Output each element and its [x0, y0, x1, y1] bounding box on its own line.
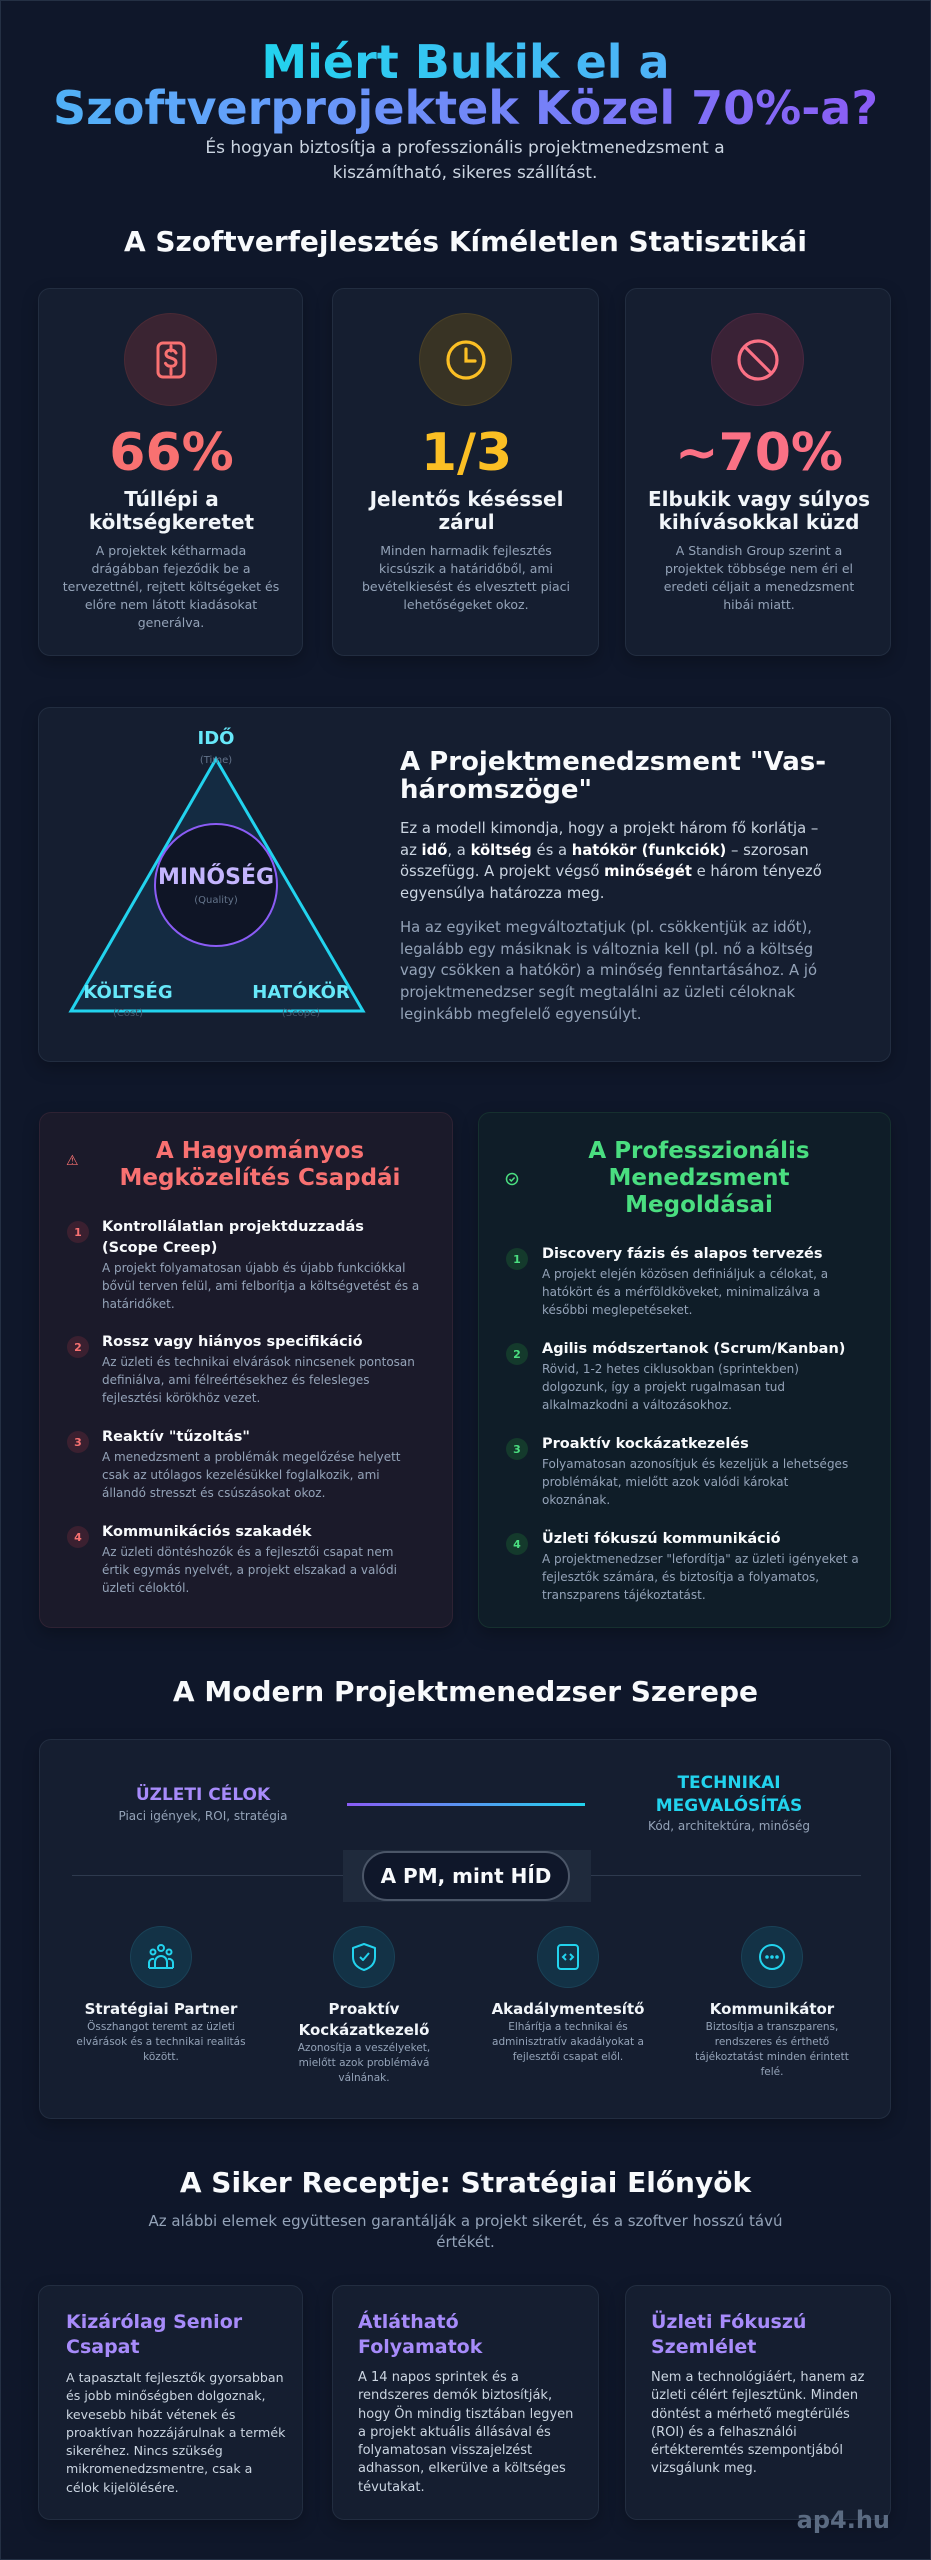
icon: code [537, 1926, 599, 1988]
role: risk manager [298, 1926, 430, 2084]
panel: traditional pitfalls: 4 [74, 1530, 82, 1544]
item 4 [506, 1530, 859, 1602]
title: Miért Bukik el a [261, 35, 670, 89]
item 1: A projekt folyamatosan újabb és újabb funkciókkal bővül terven felül, ami felborítja a költségvetést és a határidőket. [102, 1261, 419, 1311]
item 4: Az üzleti döntéshozók és a fejlesztői csapat nem értik egymás nyelvét, a projekt elszakad a valódi üzleti céloktól. [102, 1545, 397, 1595]
text block: explanation: az idő, a költség és a hatókör (funkciók) – szorosan [400, 842, 809, 859]
panel: PM bridge [39, 1739, 891, 2119]
benefit card: transparent processes [332, 2285, 599, 2520]
benefit card: senior team [38, 2285, 303, 2520]
item 2: Rossz vagy hiányos specifikáció [102, 1334, 363, 1350]
panel: traditional pitfalls: 1 [74, 1226, 82, 1238]
icon: check circle [506, 1172, 518, 1186]
panel: traditional pitfalls: 3 [74, 1436, 82, 1448]
panel: traditional pitfalls [39, 1112, 453, 1628]
panel: professional solutions: 3 [513, 1442, 521, 1456]
triangle diagram [68, 727, 366, 1019]
benefit card: business focus: Üzleti Fókuszú Szemlélet [651, 2311, 806, 2358]
benefit card: senior team: sikeréhez. Nincs szükség [66, 2443, 223, 2458]
business goals: ÜZLETI CÉLOK [136, 1785, 270, 1805]
item 3: A menedzsment a problémák megelőzése helyett csak az utólagos kezelésükkel foglalkozik, ami állandó stresszt és csúszásokat okoz. [102, 1450, 400, 1500]
PM bridge pill: A PM, mint HÍD [381, 1864, 551, 1888]
item 2: Az üzleti és technikai elvárások nincsenek pontosan definiálva, ami félreértésekhez és felesleges fejlesztési körökhöz vezet. [102, 1355, 415, 1405]
text block: explanation: Ez a modell kimondja, hogy a projekt három fő korlátja – [400, 820, 818, 837]
stat label: Elbukik vagy súlyos kihívásokkal küzd [648, 487, 870, 534]
triangle diagram: MINŐSÉG [158, 864, 274, 890]
item 2 [506, 1341, 845, 1412]
panel: professional solutions: 4 [513, 1538, 521, 1550]
item 3: okoznának. [542, 1493, 610, 1507]
panel: iron triangle [38, 707, 891, 1062]
text block: explanation: egyensúlya határozza meg. [400, 885, 605, 902]
PM bridge pill [343, 1850, 591, 1902]
role: communicator: Kommunikátor [710, 2000, 834, 2018]
role: risk manager: Proaktív Kockázatkezelő [299, 2000, 429, 2039]
benefit card: senior team: és jobb minőségben dolgoznak, [66, 2388, 266, 2403]
icon: chat dots [741, 1926, 803, 1988]
benefit card: senior team: proaktívan hozzájárulnak a termék [66, 2425, 285, 2440]
item 4: A projektmenedzser "lefordítja" az üzleti igényeket a fejlesztők számára, és biztosítja a folyamatos, transzparens tájékoztatást. [542, 1552, 859, 1602]
heading: solutions: A Professzionális Menedzsment Megoldásai [588, 1138, 810, 1218]
panel: professional solutions [478, 1112, 891, 1628]
benefit card: transparent processes: A 14 napos sprintek és a rendszeres demók biztosítják, hogy Ön mindig tisztában legyen a projekt aktuális állásával és folyamatosan visszajelzést adhasson, elkerülve a költséges tévutakat. [358, 2370, 573, 2495]
item 3 [67, 1429, 400, 1500]
stat description: A Standish Group szerint a projektek többsége nem éri el eredeti céljait a menedzsment hibái miatt. [664, 543, 854, 612]
item 3: Folyamatosan azonosítjuk és kezeljük a lehetséges [542, 1457, 848, 1471]
technical implementation: Kód, architektúra, minőség [648, 1819, 810, 1833]
item 3: Reaktív "tűzoltás" [102, 1429, 250, 1445]
role: strategic partner: Stratégiai Partner [85, 2000, 237, 2018]
role: strategic partner [76, 1926, 246, 2063]
triangle diagram: (Cost) [113, 1008, 143, 1019]
item 3 [506, 1436, 848, 1507]
item 4 [67, 1524, 397, 1595]
benefit card: senior team: Kizárólag Senior Csapat [66, 2311, 242, 2358]
icon: clock [419, 313, 512, 406]
stat number: 1/3 [421, 423, 512, 483]
role: risk manager: Azonosítja a veszélyeket, mielőtt azok problémává válnának. [298, 2042, 430, 2084]
heading: success recipe: A Siker Receptje: Stratégiai Előnyök [180, 2166, 751, 2199]
item 2: Rövid, 1-2 hetes ciklusokban (sprintekben) dolgozunk, így a projekt rugalmasan tud alkalmazkodni a változásokhoz. [542, 1362, 799, 1412]
item 2 [67, 1334, 415, 1405]
icon: users [130, 1926, 192, 1988]
heading: PM role: A Modern Projektmenedzser Szerepe [173, 1675, 758, 1708]
benefit card: transparent processes: Átlátható Folyamatok [358, 2311, 482, 2358]
icon: shield [333, 1926, 395, 1988]
item 4: Üzleti fókuszú kommunikáció [542, 1531, 781, 1547]
item 3: Proaktív kockázatkezelés [542, 1436, 749, 1452]
benefit card: business focus [625, 2285, 891, 2520]
stat card: failure [625, 288, 891, 656]
stat label: Túllépi a költségkeretet [89, 487, 254, 534]
benefit card: senior team: kevesebb hibát vétenek és [66, 2407, 235, 2422]
icon: ban [711, 313, 804, 406]
text block: explanation: Ha az egyiket megváltoztatjuk (pl. csökkentjük az időt), legalább egy másiknak is változnia kell (pl. nő a költség vagy csökken a hatókör) a minőség fenntartásához. A jó projektmenedzser segít megtalálni az üzleti céloknak leginkább megfelelő egyensúlyt. [400, 919, 817, 1023]
panel: professional solutions: 2 [513, 1348, 521, 1360]
item 1: Kontrollálatlan projektduzzadás (Scope Creep) [102, 1219, 364, 1256]
item 1 [67, 1219, 419, 1311]
benefit card: senior team: célok kijelölésére. [66, 2480, 179, 2495]
item 4: Kommunikációs szakadék [102, 1524, 312, 1540]
triangle diagram: (Time) [200, 755, 232, 766]
icon: dollar [124, 313, 217, 406]
stat label: Jelentős késéssel zárul [370, 487, 563, 534]
triangle diagram: HATÓKÖR [252, 981, 350, 1003]
panel: traditional pitfalls: 2 [74, 1340, 82, 1354]
title: Szoftverprojektek Közel 70%-a? [53, 81, 878, 135]
benefit card: business focus: Nem a technológiáért, hanem az üzleti célért fejlesztünk. Minden döntést a mérhető megtérülés (ROI) és a felhasználói értékteremtés szempontjából vizsgálunk meg. [651, 2370, 864, 2476]
stat card: cost overrun [38, 288, 303, 656]
gradient connector [347, 1803, 585, 1806]
stat number: ~70% [675, 423, 843, 483]
stat card: delay [332, 288, 599, 656]
subtitle: És hogyan biztosítja a professzionális projektmenedzsment a kiszámítható, sikeres szállítást. [205, 138, 725, 183]
watermark: ap4.hu [797, 2506, 890, 2534]
stat description: A projektek kétharmada drágábban fejeződik be a tervezettnél, rejtett költségeket és előre nem látott kiadásokat generálva. [63, 543, 279, 630]
panel: professional solutions: 1 [513, 1252, 521, 1266]
triangle diagram: (Scope) [282, 1008, 320, 1019]
item 1 [506, 1246, 828, 1317]
item 1: Discovery fázis és alapos tervezés [542, 1246, 822, 1262]
stat description: Minden harmadik fejlesztés kicsúszik a határidőből, ami bevételkiesést és elvesztett piaci lehetőségeket okoz. [362, 543, 570, 612]
title [53, 35, 878, 135]
technical implementation [648, 1773, 810, 1833]
role: communicator: Biztosítja a transzparens, rendszeres és érthető tájékoztatást minden érintett felé. [695, 2021, 849, 2078]
heading: statistics: A Szoftverfejlesztés Kíméletlen Statisztikái [124, 225, 807, 258]
role: obstacle remover [492, 1926, 644, 2063]
text block: explanation [400, 820, 822, 1023]
triangle diagram: (Quality) [194, 895, 238, 906]
item 1: A projekt elején közösen definiáljuk a célokat, a hatókört és a mérföldköveket, minimalizálva a későbbi meglepetéseket. [542, 1267, 828, 1317]
technical implementation: TECHNIKAI MEGVALÓSÍTÁS [656, 1773, 802, 1816]
benefit card: senior team: mikromenedzsmentre, csak a [66, 2461, 252, 2476]
role: strategic partner: Összhangot teremt az üzleti elvárások és a technikai realitás között. [76, 2021, 246, 2063]
business goals [118, 1784, 288, 1823]
role: communicator [695, 1926, 849, 2078]
role: obstacle remover: Elhárítja a technikai és adminisztratív akadályokat a fejlesztői csapat elől. [492, 2021, 644, 2063]
item 2: Agilis módszertanok (Scrum/Kanban) [542, 1341, 845, 1357]
benefit card: senior team: A tapasztalt fejlesztők gyorsabban [66, 2370, 284, 2385]
subtitle: success recipe: Az alábbi elemek együttesen garantálják a projekt sikerét, és a szoftver hosszú távú értékét. [148, 2212, 782, 2251]
item 3: problémákat, mielőtt azok valódi károkat [542, 1475, 788, 1489]
text block: explanation: összefügg. A projekt végső minőségét e három tényező [400, 863, 822, 880]
icon: warning: ⚠ [66, 1153, 79, 1169]
stat number: 66% [109, 423, 234, 483]
heading: iron triangle: A Projektmenedzsment "Vas-háromszöge" [400, 747, 826, 805]
triangle diagram: IDŐ [198, 727, 234, 749]
role: obstacle remover: Akadálymentesítő [492, 2000, 644, 2018]
triangle diagram: KÖLTSÉG [83, 981, 173, 1003]
business goals: Piaci igények, ROI, stratégia [118, 1809, 288, 1823]
heading: pitfalls: A Hagyományos Megközelítés Csapdái [120, 1138, 400, 1191]
